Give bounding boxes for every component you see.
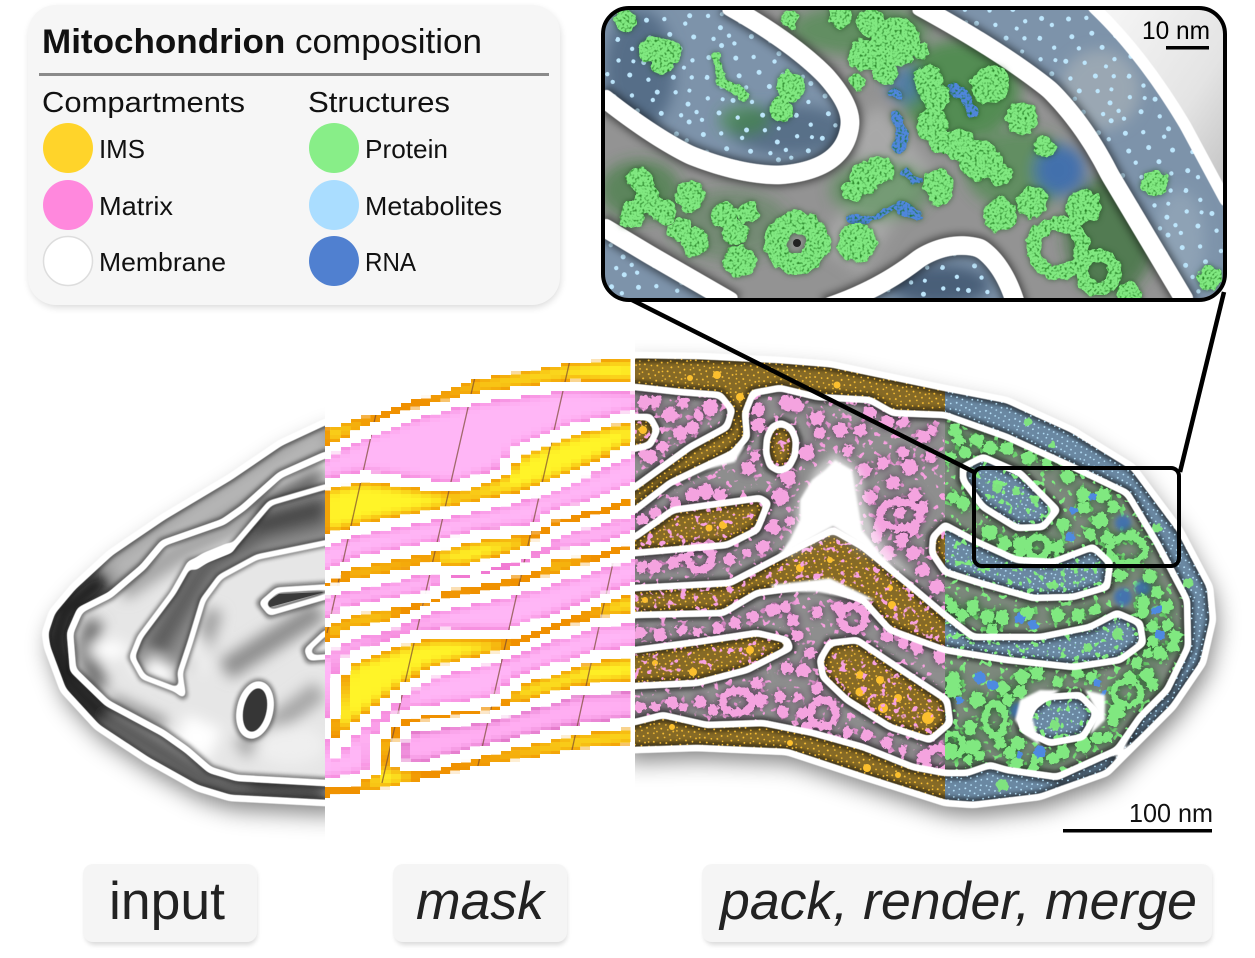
label: mask (393, 864, 567, 945)
tile seams (327, 360, 613, 783)
legend title: Mitochondrion composition (42, 23, 482, 61)
label: mask: mask (416, 872, 547, 931)
pink protein rings (688, 502, 950, 772)
inset IMS regions (600, 0, 1230, 305)
scale bar: 10 nm: 10 nm (1142, 17, 1210, 45)
membrane: input white lines (45, 418, 340, 803)
matrix shading with green tint (600, 5, 1155, 295)
inset white membranes (600, 4, 1228, 308)
legend group: compartments: Matrix (99, 191, 173, 221)
inset metabolites dots (600, 0, 1230, 305)
legend group: structures: Protein (365, 134, 448, 164)
zoom window rectangle (974, 468, 1179, 566)
label: input (83, 864, 257, 945)
legend group: structures: Metabolites (365, 191, 502, 221)
legend group: structures: RNA (365, 247, 417, 277)
section: pack, render, merge coloured bases (620, 350, 1220, 810)
label: pack, render, merge (702, 864, 1212, 945)
outer drop shadow (49, 366, 1217, 816)
legend group: compartments: IMS (99, 134, 145, 164)
scale bar: 100 nm (1063, 798, 1213, 832)
RNA strands (956, 493, 1165, 758)
label: input: input (109, 872, 225, 931)
top right corner exterior (1104, 10, 1223, 184)
matrix: pink protein clusters (635, 390, 945, 770)
IMS speckle: blue metabolites (945, 392, 1209, 802)
section: input greyscale micrograph (42, 419, 325, 807)
panel: legend (28, 5, 560, 307)
white cytoplasm patches (675, 445, 915, 600)
white patches in right section (1015, 690, 1105, 745)
membrane: white lines of packed section (620, 355, 1213, 805)
legend group: compartments: Membrane (99, 247, 226, 277)
inset membrane shadow (600, 4, 1187, 308)
dark RNA tint (1009, 515, 1151, 718)
legend group: compartments: Compartments (42, 87, 245, 119)
inset protein clusters (616, 6, 1220, 306)
IMS speckle: gold metabolites (620, 350, 950, 810)
inset protein rings (776, 222, 1115, 289)
label: pack, render, merge: pack, render, merge (718, 872, 1197, 931)
panel: mitochondrion cross-section (30, 340, 1220, 820)
green protein rings (941, 537, 1145, 756)
inset RNA strands (850, 88, 972, 220)
section: mask colour tiles (325, 359, 635, 798)
scale bar: 100 nm: 100 nm (1129, 798, 1213, 828)
panel: zoomed inset (600, 0, 1230, 308)
legend group: structures: Structures (308, 87, 450, 119)
legend group: compartments (42, 87, 245, 286)
hole: dark oval (242, 688, 268, 732)
matrix: green protein clusters and blue RNA (945, 419, 1185, 773)
shading along membranes (620, 355, 1213, 805)
connector lines to inset (628, 292, 1224, 472)
legend group: structures (308, 87, 502, 286)
